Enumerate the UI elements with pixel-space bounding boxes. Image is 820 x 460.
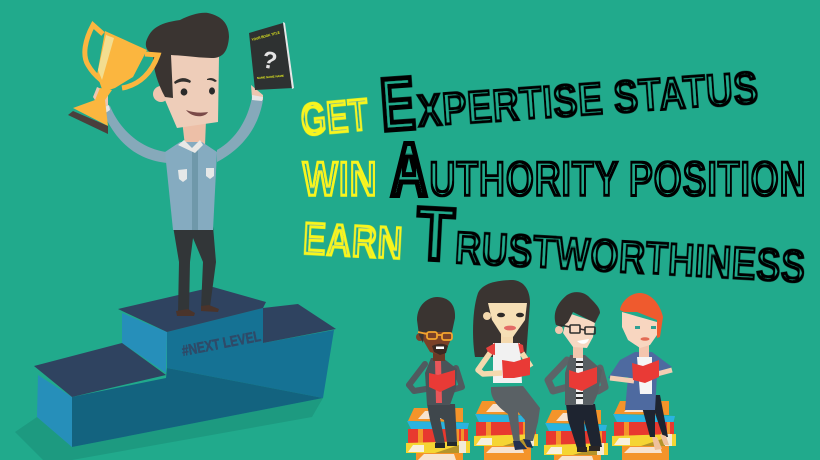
shoes xyxy=(577,446,600,452)
glasses xyxy=(560,325,595,334)
jacket xyxy=(565,355,602,405)
feet xyxy=(652,434,669,450)
glasses xyxy=(418,332,452,340)
sleeves xyxy=(486,343,524,355)
hair xyxy=(417,297,455,343)
reader 2 xyxy=(473,280,540,450)
face xyxy=(422,323,452,355)
top xyxy=(493,343,522,383)
book xyxy=(249,22,294,90)
jacket xyxy=(425,358,457,405)
man with trophy and book xyxy=(68,13,294,316)
neck xyxy=(501,325,513,345)
neck xyxy=(573,347,583,358)
red shirt xyxy=(435,360,442,403)
ear xyxy=(153,86,169,102)
book xyxy=(429,370,455,392)
white top xyxy=(637,357,652,394)
big T: T xyxy=(414,191,457,277)
shoes xyxy=(435,442,457,448)
lips xyxy=(504,326,516,330)
podium xyxy=(15,287,336,460)
book: YOUR BOOK TITLE xyxy=(251,30,281,42)
legs xyxy=(491,386,540,443)
reader 4 xyxy=(608,293,672,450)
book: ? xyxy=(260,46,279,75)
EARN: EARN xyxy=(301,212,404,269)
neck xyxy=(182,120,206,146)
hands xyxy=(93,85,263,108)
legs xyxy=(427,404,457,444)
face xyxy=(563,313,595,348)
legs xyxy=(173,226,219,316)
ear xyxy=(483,312,491,320)
face xyxy=(165,54,219,128)
striped shirt xyxy=(576,358,583,404)
eyes xyxy=(635,326,656,329)
face xyxy=(488,303,527,337)
neck xyxy=(639,345,649,357)
cuffs xyxy=(101,95,263,114)
book xyxy=(632,360,659,383)
eyes and brows xyxy=(174,78,217,84)
arms xyxy=(409,364,462,391)
book xyxy=(502,357,530,378)
headline line 2 xyxy=(302,127,806,213)
big E: E xyxy=(377,61,418,147)
trophy xyxy=(68,25,158,134)
shirt xyxy=(165,142,217,230)
book: NAME NAME NAME xyxy=(257,74,284,80)
hair xyxy=(146,13,229,98)
legs xyxy=(566,404,602,448)
arms xyxy=(548,360,605,391)
hair xyxy=(620,293,663,338)
face xyxy=(622,312,657,348)
podium label: #NEXT LEVEL xyxy=(181,328,262,360)
mouth xyxy=(186,110,208,116)
jacket xyxy=(608,352,672,410)
beard and smile xyxy=(432,344,448,355)
eyes xyxy=(497,313,524,317)
lips xyxy=(640,337,650,341)
ear xyxy=(555,326,563,334)
hair back xyxy=(473,280,530,357)
headline line 1 xyxy=(298,61,760,147)
collar xyxy=(178,140,203,153)
shoes xyxy=(513,439,533,450)
reader 1 xyxy=(409,297,462,448)
arms xyxy=(478,353,531,374)
WIN: WIN xyxy=(302,151,377,207)
arms xyxy=(103,97,263,163)
pockets xyxy=(178,168,214,182)
GET: GET xyxy=(298,88,371,146)
smile xyxy=(577,339,589,344)
book xyxy=(569,367,597,391)
hair xyxy=(555,292,600,327)
arms xyxy=(610,370,672,381)
reader 3 xyxy=(548,292,605,452)
book stacks xyxy=(406,401,676,460)
neck xyxy=(433,345,445,361)
legs xyxy=(642,395,668,437)
headline line 3 xyxy=(301,191,807,293)
big A: A xyxy=(390,127,428,213)
ear xyxy=(416,333,424,341)
